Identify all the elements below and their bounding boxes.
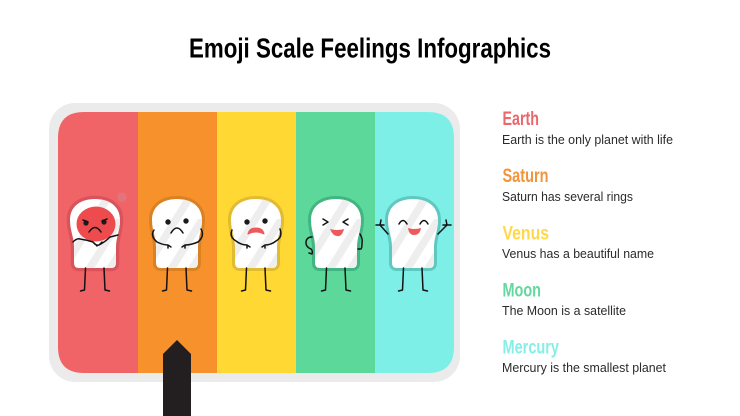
sign frame	[49, 103, 460, 382]
legend: Moon	[502, 280, 626, 318]
title: Emoji Scale Feelings Infographics	[189, 32, 551, 64]
legend: Earth	[502, 108, 673, 147]
panel: emoji scale sign	[49, 103, 460, 416]
colour scale bands	[58, 112, 454, 373]
legend: Saturn	[502, 165, 633, 204]
legend: Saturn: Saturn has several rings	[502, 190, 633, 204]
character: smiling	[298, 197, 366, 291]
legend: Mercury	[502, 336, 667, 375]
legend: Mercury: Mercury	[502, 336, 559, 358]
legend: Venus: Venus has a beautiful name	[502, 247, 654, 261]
character: sad	[140, 197, 207, 291]
character: worried	[218, 197, 286, 291]
legend: Earth: Earth	[502, 108, 539, 130]
sign handle tip over bands	[163, 340, 191, 373]
legend: Mercury: Mercury is the smallest planet	[502, 361, 667, 375]
legend: Venus: Venus	[502, 222, 549, 244]
character: angry	[58, 192, 127, 291]
legend: Earth: Earth is the only planet with life	[502, 133, 673, 147]
legend: Venus	[502, 222, 654, 261]
legend: Moon: Moon	[502, 280, 541, 302]
legend: Moon: The Moon is a satellite	[502, 304, 626, 318]
character: very happy	[376, 197, 451, 291]
sign handle	[163, 340, 191, 416]
legend: Saturn: Saturn	[502, 165, 548, 187]
